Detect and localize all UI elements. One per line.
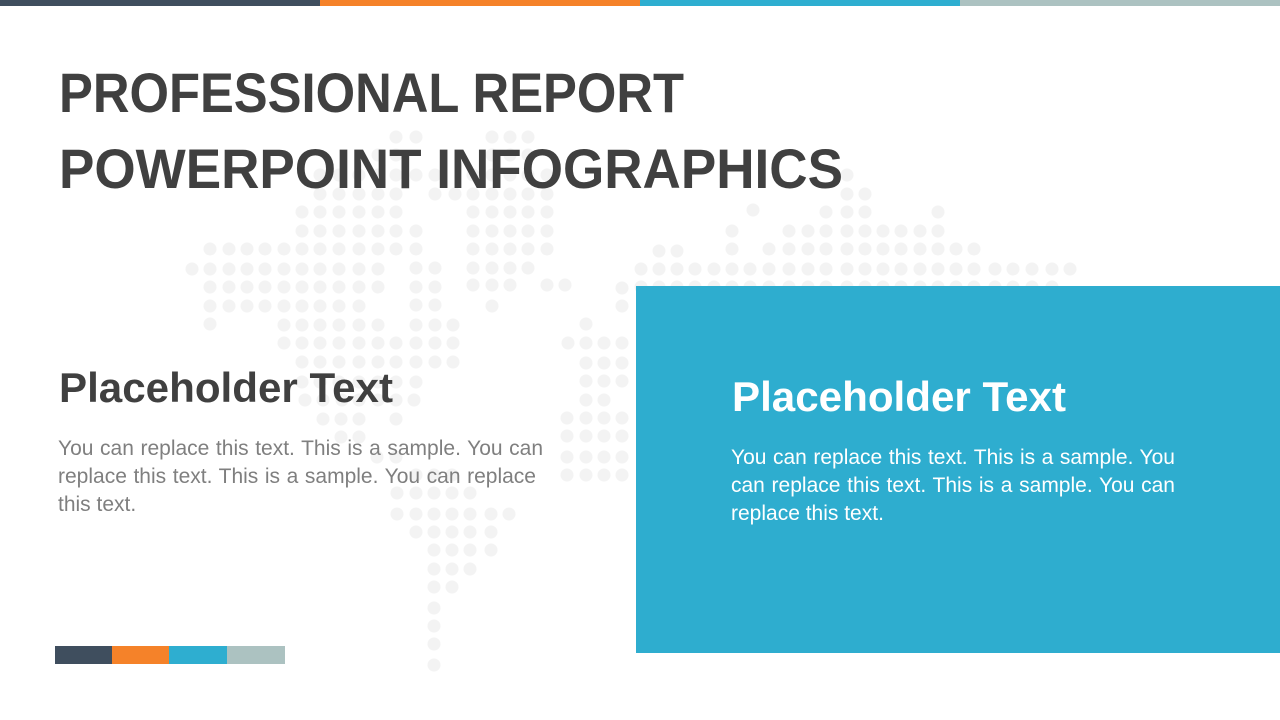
left body text: You can replace this text. This is a sample. You can bbox=[58, 437, 543, 460]
blue panel bbox=[636, 286, 1280, 653]
left body text bbox=[58, 437, 543, 516]
right heading: Placeholder Text bbox=[732, 373, 1066, 420]
left body text: this text. bbox=[58, 493, 136, 516]
right body text: can replace this text. This is a sample. You can bbox=[731, 474, 1175, 497]
title: POWERPOINT INFOGRAPHICS bbox=[59, 137, 843, 200]
right body text bbox=[731, 446, 1175, 525]
bottom colour key bbox=[55, 646, 285, 664]
right body text: replace this text. bbox=[731, 502, 884, 525]
top colour bar bbox=[0, 0, 1280, 6]
left body text: replace this text. This is a sample. You can replace bbox=[58, 465, 536, 488]
title: PROFESSIONAL REPORT bbox=[59, 61, 684, 124]
left heading: Placeholder Text bbox=[59, 364, 393, 411]
right body text: You can replace this text. This is a sample. You bbox=[731, 446, 1175, 469]
title bbox=[59, 61, 843, 200]
